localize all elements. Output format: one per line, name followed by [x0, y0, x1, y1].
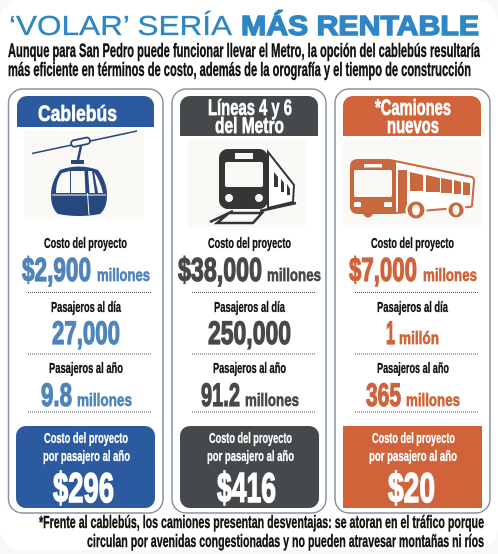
passengers per day: metro — [192, 300, 315, 354]
passengers per year: metro: 91.2 — [201, 377, 240, 413]
passengers per day: camiones: Pasajeros al día — [377, 300, 449, 316]
cost per passenger box: cablebús: por pasajero al año — [43, 449, 130, 465]
panel: metro — [172, 89, 326, 513]
title: ‘VOLAR’ SERÍA — [9, 10, 232, 41]
icon: bus — [343, 140, 481, 227]
title: MÁS RENTABLE — [241, 10, 479, 41]
cost per passenger box: metro — [180, 426, 319, 511]
passengers per year: camiones — [355, 361, 479, 413]
passengers per day: cablebús — [28, 300, 152, 354]
cost per passenger box: metro: Costo del proyecto — [209, 431, 292, 447]
passengers per year: cablebús — [28, 361, 152, 413]
cost: metro: $38,000 — [178, 251, 262, 288]
passengers per year: metro: Pasajeros al año — [213, 361, 286, 377]
passengers per year: cablebús: Pasajeros al año — [49, 361, 123, 377]
header: cablebús — [17, 96, 154, 127]
cost: metro: millones — [267, 265, 321, 285]
cost: metro — [178, 236, 321, 292]
cost: camiones: $7,000 — [349, 251, 417, 288]
icon: cable car — [24, 130, 144, 217]
cost per passenger box: cablebús — [16, 426, 155, 511]
panel: cablebús — [8, 89, 163, 513]
title — [9, 10, 479, 41]
panel: camiones — [335, 89, 490, 513]
cost: cablebús — [22, 236, 152, 292]
header: camiones: nuevos — [387, 113, 439, 138]
passengers per day: cablebús: Pasajeros al día — [51, 300, 122, 316]
passengers per day: camiones — [355, 300, 479, 354]
cost: metro: Costo del proyecto — [208, 236, 291, 252]
cost: cablebús: Costo del proyecto — [44, 236, 127, 252]
header: metro — [180, 95, 318, 138]
passengers per year: camiones: millones — [406, 390, 460, 410]
passengers per day: metro: 250,000 — [208, 315, 291, 351]
passengers per day: metro: Pasajeros al día — [214, 300, 286, 316]
cost per passenger box: camiones: por pasajero al año — [369, 449, 457, 465]
header: camiones: *Camiones — [375, 95, 451, 120]
passengers per year: camiones: Pasajeros al año — [377, 361, 449, 377]
header: metro: Líneas 4 y 6 — [208, 95, 292, 120]
subtitle — [8, 41, 480, 81]
cost per passenger box: metro: $416 — [217, 464, 276, 511]
header: camiones — [343, 95, 481, 138]
passengers per year: camiones: 365 — [366, 377, 401, 413]
cost per passenger box: camiones: $20 — [388, 464, 435, 511]
header: cablebús: Cablebús — [38, 101, 117, 126]
passengers per year: metro: millones — [245, 390, 299, 410]
cost: cablebús: $2,900 — [22, 251, 91, 288]
cost: camiones: millones — [423, 265, 477, 285]
cost per passenger box: camiones — [343, 426, 482, 511]
passengers per day: cablebús: 27,000 — [52, 315, 120, 351]
passengers per year: metro — [192, 361, 315, 413]
passengers per day: camiones: millón — [399, 328, 439, 348]
passengers per year: cablebús: 9.8 — [41, 377, 72, 413]
cost per passenger box: cablebús: $296 — [53, 464, 114, 511]
icon: train — [188, 140, 306, 227]
passengers per year: cablebús: millones — [77, 390, 132, 410]
cost: cablebús: millones — [97, 265, 150, 285]
header: metro: del Metro — [215, 113, 284, 138]
cost: camiones — [349, 236, 479, 292]
cost per passenger box: metro: por pasajero al año — [207, 449, 294, 465]
passengers per day: camiones: 1 — [386, 315, 395, 351]
footnote — [39, 512, 484, 551]
cost per passenger box: cablebús: Costo del proyecto — [44, 431, 128, 447]
